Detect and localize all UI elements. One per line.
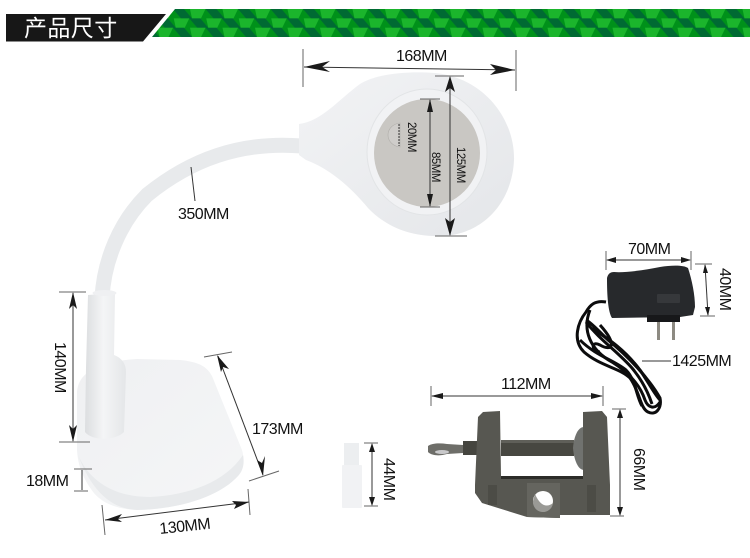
dimension: 140MM stem: 140MM xyxy=(51,342,68,393)
clamp xyxy=(428,411,610,518)
dimension: 173MM base depth: 173MM xyxy=(252,421,303,438)
adapter body xyxy=(607,266,695,318)
lens ring xyxy=(367,89,487,215)
dimension: 66MM clamp height: 66MM xyxy=(630,448,647,491)
dimension: 20MM inset xyxy=(399,122,417,152)
dimension: 18MM base thickness: 18MM xyxy=(26,473,69,490)
dimension: 44MM tube: 44MM xyxy=(380,458,397,501)
dimension: 125MM outer height: 125MM xyxy=(454,147,466,183)
small lens inset xyxy=(388,123,400,147)
dimension: 130MM base width xyxy=(102,489,250,538)
adapter base xyxy=(647,315,680,322)
dimension: 44MM tube xyxy=(364,443,397,506)
clamp frame xyxy=(475,411,610,518)
title banner xyxy=(6,14,166,42)
dimension: 40MM adapter height: 40MM xyxy=(716,268,733,311)
clamp centre block xyxy=(527,483,560,518)
dimension: 112MM clamp width xyxy=(431,376,603,406)
dimension: 168MM width: 168MM xyxy=(396,48,447,65)
dimension: 125MM outer height xyxy=(435,76,467,236)
clamp screw xyxy=(428,427,584,470)
adapter pin (white tube) xyxy=(342,443,362,508)
dimension: 112MM clamp width: 112MM xyxy=(501,376,551,393)
adapter cord xyxy=(577,302,660,413)
dimension: 140MM stem xyxy=(51,292,90,442)
dimension: 40MM adapter height xyxy=(695,264,733,316)
green patterned header band xyxy=(152,9,750,37)
dimension: 85MM lens height xyxy=(420,99,441,207)
dimension: 130MM base width: 130MM xyxy=(159,516,211,538)
dimension: 85MM lens height: 85MM xyxy=(429,152,441,182)
dimension: 350MM arm: 350MM xyxy=(178,206,229,223)
dimension: 70MM adapter width: 70MM xyxy=(628,241,671,258)
dimension: 66MM clamp height xyxy=(610,409,647,516)
lamp stem xyxy=(85,290,126,439)
lens disc xyxy=(374,99,480,207)
base plate xyxy=(77,359,244,510)
dimension: 350MM arm xyxy=(178,167,229,223)
gooseneck arm xyxy=(102,145,302,298)
adapter prongs xyxy=(657,322,675,340)
dimension: 1425MM cord: 1425MM xyxy=(672,353,731,370)
dimension: 168MM width xyxy=(303,48,516,91)
dimension: 70MM adapter width xyxy=(606,241,691,270)
dimension: 20MM inset: 20MM xyxy=(405,122,417,152)
dimension: 18MM base thickness xyxy=(26,469,92,491)
title text: 产品尺寸 xyxy=(24,15,118,41)
dimension: 173MM base depth xyxy=(204,352,303,481)
power adapter xyxy=(577,266,695,413)
dimension: 1425MM cord xyxy=(642,353,731,370)
magnifier head xyxy=(299,72,514,236)
